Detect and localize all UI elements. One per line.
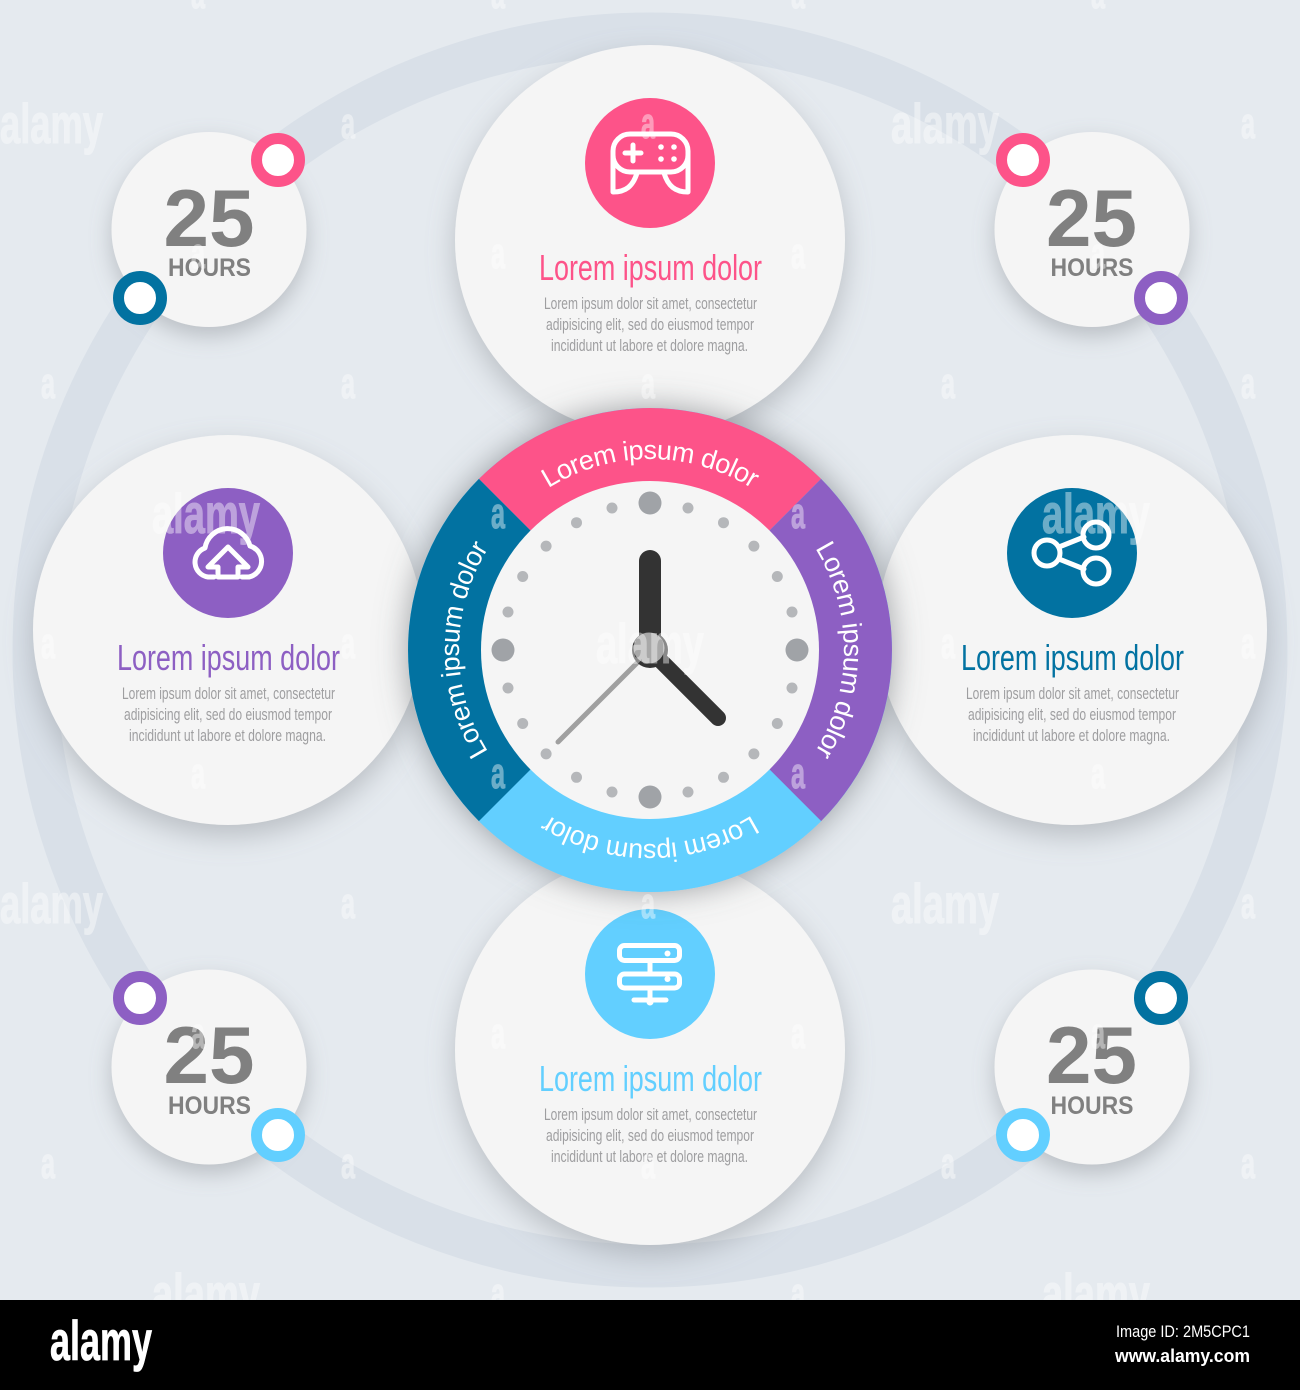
text block: adipisicing elit, sed do eiusmod tempor — [968, 706, 1176, 724]
number: 25 — [164, 174, 254, 264]
label: HOURS — [168, 1092, 251, 1120]
panel: right card — [877, 435, 1267, 825]
watermark: a — [341, 99, 355, 148]
clock — [388, 388, 912, 912]
label: HOURS — [168, 254, 251, 282]
label: left segment: Lorem ipsum dolor — [440, 540, 487, 760]
watermark: a — [791, 749, 805, 798]
watermark: a — [1091, 749, 1105, 798]
watermark: alamy — [0, 92, 103, 155]
panel: hours top right — [994, 132, 1190, 327]
panel: hours bottom right — [994, 970, 1190, 1164]
footer band — [0, 1300, 1300, 1390]
marker: teal top left — [118, 276, 162, 320]
panel: hours bottom left — [112, 970, 306, 1164]
text block — [122, 685, 335, 745]
watermark: a — [491, 1009, 505, 1058]
text block: Lorem ipsum dolor sit amet, consectetur — [544, 295, 757, 313]
watermark: a — [191, 229, 205, 278]
watermark: a — [341, 1139, 355, 1188]
panel: bottom card — [455, 855, 845, 1245]
watermark: a — [941, 619, 955, 668]
watermark: a — [41, 619, 55, 668]
watermark: a — [1241, 1139, 1255, 1188]
text block: Lorem ipsum dolor sit amet, consectetur — [122, 685, 335, 703]
second hand — [558, 650, 650, 742]
heading: Lorem ipsum dolor — [961, 637, 1184, 678]
hour hand — [650, 650, 718, 718]
marker: sky bottom left — [256, 1114, 300, 1156]
watermark: alamy — [1042, 482, 1150, 545]
segment: teal — [408, 479, 650, 821]
watermark: a — [641, 359, 655, 408]
text block: incididunt ut labore et dolore magna. — [551, 1148, 748, 1166]
panel: left card — [33, 435, 423, 825]
watermark: alamy — [0, 872, 103, 935]
watermark: alamy — [891, 872, 999, 935]
watermark: a — [491, 1269, 505, 1318]
number: 25 — [1046, 1011, 1137, 1101]
watermark: a — [41, 359, 55, 408]
watermark: a — [191, 749, 205, 798]
minute marks — [502, 502, 798, 798]
hub — [632, 632, 668, 668]
watermark: a — [1241, 359, 1255, 408]
watermark: a — [191, 1009, 205, 1058]
watermark: alamy — [152, 482, 260, 545]
text block: adipisicing elit, sed do eiusmod tempor — [124, 706, 332, 724]
segment: sky — [479, 650, 821, 892]
watermark: a — [641, 1139, 655, 1188]
segment: purple — [650, 479, 892, 821]
watermark: alamy — [891, 92, 999, 155]
text block: adipisicing elit, sed do eiusmod tempor — [546, 316, 754, 334]
label: HOURS — [1050, 254, 1134, 282]
clock face — [481, 481, 819, 819]
watermark: a — [941, 1139, 955, 1188]
watermark: a — [791, 1269, 805, 1318]
icon: share nodes — [1034, 522, 1109, 584]
marker: teal — [1140, 976, 1182, 1020]
marker: pink — [256, 138, 300, 182]
heading: Lorem ipsum dolor — [117, 637, 340, 678]
image id: Image ID: 2M5CPC1 — [1116, 1322, 1250, 1341]
panel: top card — [455, 45, 845, 435]
text block: Lorem ipsum dolor sit amet, consectetur — [544, 1106, 757, 1124]
text block: Lorem ipsum dolor sit amet, consectetur — [966, 685, 1179, 703]
watermark: a — [341, 619, 355, 668]
marker: purple top right — [1140, 276, 1182, 320]
watermark: a — [1091, 229, 1105, 278]
watermark: a — [341, 879, 355, 928]
marker: pink — [1002, 138, 1044, 182]
watermark: a — [1241, 619, 1255, 668]
segment: pink — [479, 408, 821, 650]
label: HOURS — [1050, 1092, 1134, 1120]
hour marks — [492, 492, 808, 808]
heading: Lorem ipsum dolor — [539, 247, 762, 288]
marker: purple — [118, 976, 162, 1020]
watermark: a — [791, 229, 805, 278]
watermark: a — [791, 489, 805, 538]
text block: incididunt ut labore et dolore magna. — [129, 727, 326, 745]
watermark: a — [491, 489, 505, 538]
label: right segment: Lorem ipsum dolor — [816, 540, 862, 760]
label: bottom segment: Lorem ipsum dolor — [540, 816, 759, 862]
watermark: a — [641, 99, 655, 148]
icon: server — [620, 946, 680, 1006]
watermark: alamy — [596, 612, 704, 675]
text block: incididunt ut labore et dolore magna. — [973, 727, 1170, 745]
number: 25 — [1046, 174, 1137, 264]
text block: adipisicing elit, sed do eiusmod tempor — [546, 1127, 754, 1145]
watermark: a — [791, 1009, 805, 1058]
text block — [544, 295, 757, 355]
watermark: a — [641, 879, 655, 928]
text block — [966, 685, 1179, 745]
text block — [544, 1106, 757, 1166]
watermark: a — [41, 1139, 55, 1188]
website: www.alamy.com — [1114, 1346, 1250, 1366]
watermark: a — [941, 359, 955, 408]
number: 25 — [164, 1011, 254, 1101]
minute hand — [639, 561, 661, 650]
watermark: alamy — [152, 1262, 260, 1325]
text block: incididunt ut labore et dolore magna. — [551, 337, 748, 355]
marker: sky bottom right — [1002, 1114, 1044, 1156]
watermark: a — [1241, 879, 1255, 928]
watermark: a — [491, 749, 505, 798]
footer logo: alamy — [50, 1309, 152, 1372]
watermark: a — [1091, 1009, 1105, 1058]
watermark: a — [491, 229, 505, 278]
heading: Lorem ipsum dolor — [539, 1058, 762, 1099]
icon: cloud upload — [195, 529, 262, 577]
panel: hours top left — [112, 132, 306, 327]
label: top segment: Lorem ipsum dolor — [540, 440, 760, 487]
watermark: alamy — [1042, 1262, 1150, 1325]
icon: game controller — [613, 134, 688, 192]
watermark: a — [1241, 99, 1255, 148]
watermark: a — [341, 359, 355, 408]
